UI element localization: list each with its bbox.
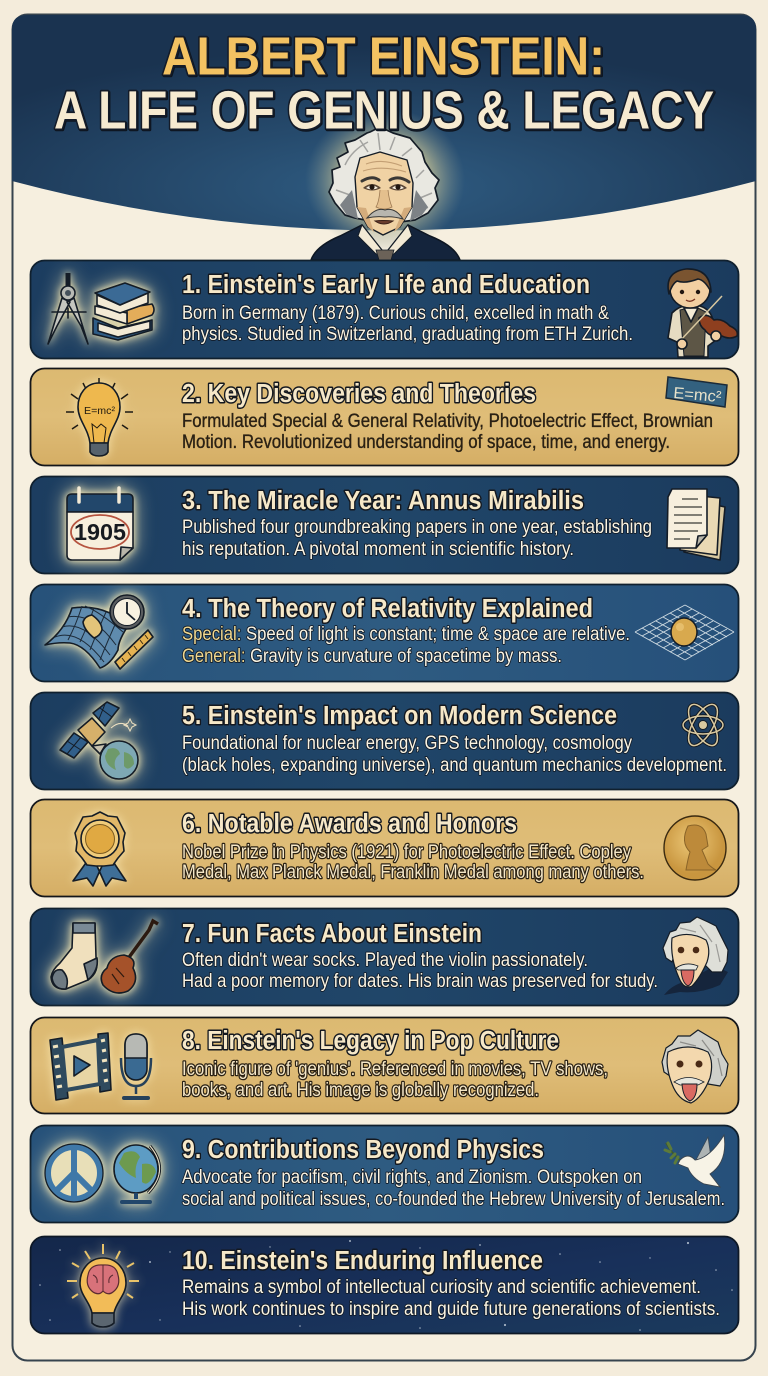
- icon: E=mc² chalkboard: E=mc²: [673, 385, 723, 406]
- icon: Einstein tongue out: [663, 917, 728, 995]
- panel: 3 miracle year: [30, 476, 738, 574]
- panel: 2 key discoveries: [30, 368, 738, 466]
- title: [54, 26, 714, 140]
- decorative stars: [39, 1240, 733, 1331]
- heading: 7. Fun Facts About Einstein: [182, 920, 482, 948]
- heading: 10. Einstein's Enduring Influence: [182, 1247, 543, 1275]
- body text: [182, 411, 713, 453]
- body text: [182, 1277, 720, 1320]
- body text: Remains a symbol of intellectual curiosity and scientific achievement.: [182, 1277, 701, 1298]
- icon: sock and violin: [51, 921, 158, 993]
- body text: Born in Germany (1879). Curious child, excelled in math &: [182, 303, 609, 324]
- body text: physics. Studied in Switzerland, graduating from ETH Zurich.: [182, 324, 633, 345]
- icon: spacetime map, clock and ruler: [45, 595, 153, 669]
- header banner: [12, 15, 756, 230]
- body text: [182, 624, 630, 667]
- heading: 3. The Miracle Year: Annus Mirabilis: [182, 487, 584, 515]
- body text: [182, 1167, 725, 1210]
- icon: compass and books: [48, 273, 154, 344]
- panel: 6 awards: [30, 800, 738, 896]
- body text: His work continues to inspire and guide future generations of scientists.: [182, 1299, 720, 1320]
- body text: Often didn't wear socks. Played the violin passionately.: [182, 950, 588, 971]
- heading: 2. Key Discoveries and Theories: [182, 380, 536, 408]
- icon: stack of papers: [667, 489, 725, 560]
- body text: [182, 733, 727, 776]
- body text: Had a poor memory for dates. His brain was preserved for study.: [182, 971, 658, 992]
- icon: Einstein portrait: [662, 1030, 728, 1103]
- heading: 4. The Theory of Relativity Explained: [182, 595, 593, 623]
- panel: 8 pop culture: [30, 1018, 738, 1114]
- heading: 1. Einstein's Early Life and Education: [182, 271, 590, 299]
- body text: books, and art. His image is globally recognized.: [182, 1080, 539, 1101]
- body text: Published four groundbreaking papers in one year, establishing: [182, 517, 652, 538]
- body text: [182, 517, 652, 560]
- heading: 9. Contributions Beyond Physics: [182, 1136, 544, 1164]
- panel: 1 early life: [30, 260, 738, 358]
- body text: [182, 1059, 608, 1101]
- icon: E=mc² chalkboard: [666, 377, 727, 407]
- body text: Special: Speed of light is constant; time & space are relative.: [182, 624, 630, 645]
- body text: Motion. Revolutionized understanding of space, time, and energy.: [182, 432, 670, 453]
- icon: 1905 calendar: 1905: [74, 519, 126, 545]
- icon: 1905 calendar: [67, 488, 133, 560]
- heading: 5. Einstein's Impact on Modern Science: [182, 702, 617, 730]
- panel: 4 relativity: [30, 584, 738, 682]
- body text: Nobel Prize in Physics (1921) for Photoelectric Effect. Copley: [182, 842, 631, 863]
- icon: satellite and earth: [60, 702, 138, 779]
- body text: Iconic figure of 'genius'. Referenced in movies, TV shows,: [182, 1059, 608, 1080]
- icon: film strip and microphone: [50, 1033, 151, 1100]
- portrait: Albert Einstein: [305, 108, 465, 260]
- title line 1: ALBERT EINSTEIN:: [162, 26, 605, 86]
- body text: Foundational for nuclear energy, GPS technology, cosmology: [182, 733, 632, 754]
- body text: [182, 842, 644, 883]
- icon: atom: [683, 700, 723, 750]
- heading: 6. Notable Awards and Honors: [182, 810, 517, 838]
- body text: [182, 950, 658, 992]
- panel: 5 impact: [30, 692, 738, 790]
- icon: gravity well grid: [635, 605, 734, 660]
- icon: light bulb with E=mc²: [66, 378, 133, 456]
- icon: boy with violin: [668, 269, 737, 357]
- panel: 9 beyond physics: [30, 1126, 738, 1222]
- icon: Nobel medal: [664, 816, 726, 880]
- heading: 8. Einstein's Legacy in Pop Culture: [182, 1027, 559, 1055]
- panel: 7 fun facts: [30, 908, 738, 1006]
- body text: Medal, Max Planck Medal, Franklin Medal among many others.: [182, 862, 644, 883]
- icon: award rosette: [73, 812, 126, 886]
- icon: dove with olive branch: [665, 1135, 725, 1187]
- body text: his reputation. A pivotal moment in scientific history.: [182, 539, 574, 560]
- body text: Formulated Special & General Relativity, Photoelectric Effect, Brownian: [182, 411, 713, 432]
- body text: Advocate for pacifism, civil rights, and Zionism. Outspoken on: [182, 1167, 642, 1188]
- icon: peace sign and globe: [45, 1144, 160, 1202]
- icon: light bulb with E=mc²: E=mc²: [84, 405, 115, 417]
- panel: 10 enduring influence: [30, 1236, 738, 1334]
- icon: bulb with brain: [67, 1244, 139, 1327]
- body text: General: Gravity is curvature of spacetime by mass.: [182, 646, 562, 667]
- body text: [182, 303, 633, 345]
